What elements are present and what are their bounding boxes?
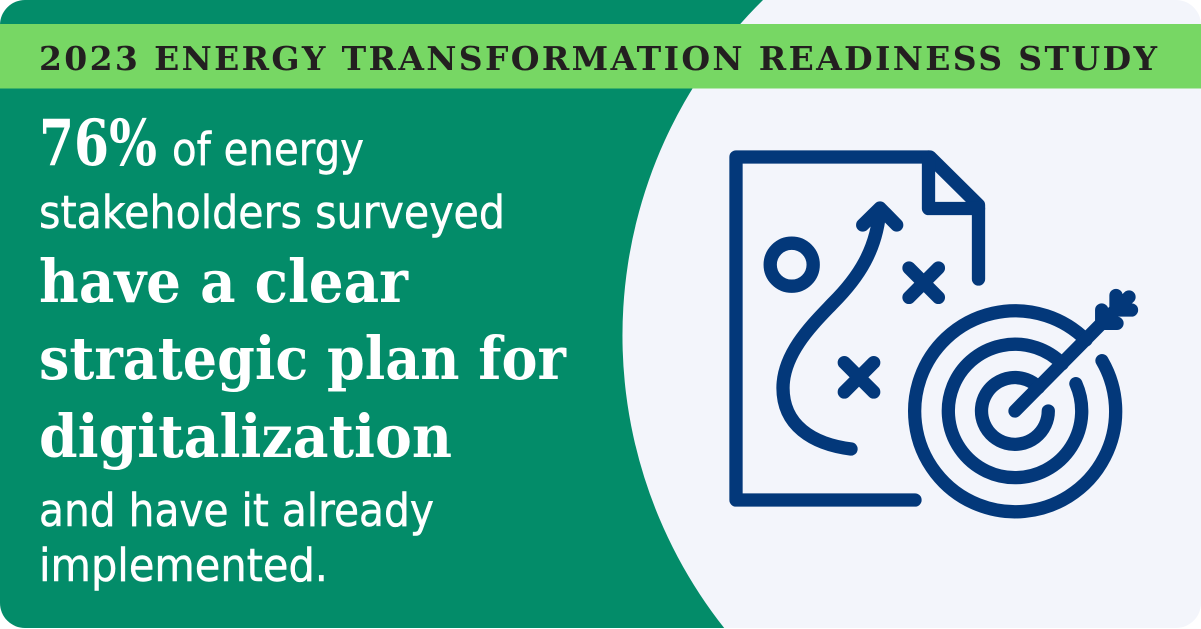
icon: document fold: [928, 157, 978, 208]
icon: document outline: [736, 157, 978, 500]
text: implemented.: implemented.: [39, 539, 328, 592]
icon: curved play arrow: [783, 208, 897, 449]
icon: strategy document with target: [736, 157, 1132, 512]
icon: x marker upper: [909, 268, 938, 297]
headline line 1: have a clear: [39, 247, 409, 316]
text: of energy: of energy: [172, 123, 364, 176]
banner title: 2023 ENERGY TRANSFORMATION READINESS STUDY: [39, 39, 1157, 78]
text: stakeholders surveyed: stakeholders surveyed: [39, 186, 505, 239]
icon: circle marker: [770, 243, 813, 286]
text block: statistic and description: [39, 106, 567, 592]
text: and have it already: and have it already: [39, 484, 434, 537]
banner: green strip: [0, 24, 1201, 88]
panel: green curved area: [0, 0, 763, 629]
headline line 2: strategic plan for: [39, 324, 567, 393]
headline line 3: digitalization: [39, 402, 452, 471]
icon: dart: [1015, 296, 1132, 411]
statistic: 76%: 76%: [39, 106, 157, 181]
icon: x marker lower: [844, 363, 874, 392]
icon: target rings: [915, 311, 1116, 512]
